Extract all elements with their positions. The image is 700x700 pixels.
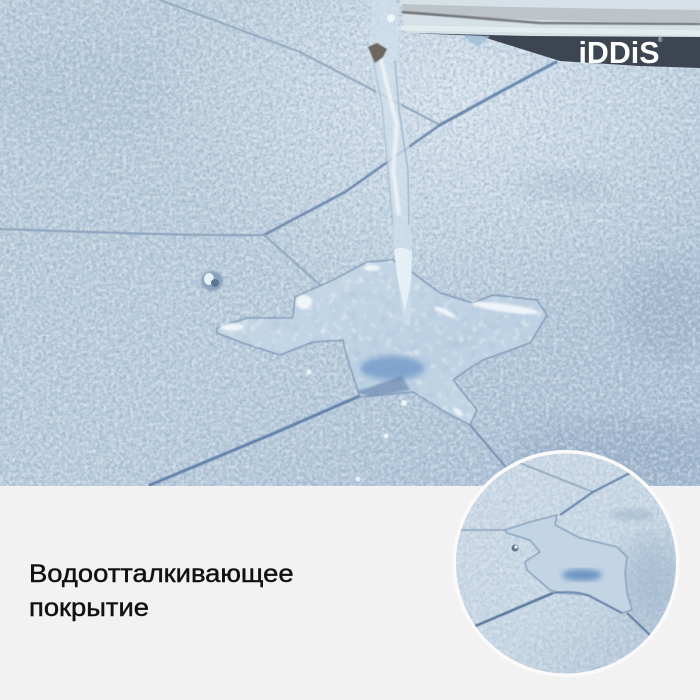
icon: water puddle [210, 255, 555, 430]
logo: iDDiS: iDDiS [578, 35, 660, 70]
water highlights [220, 265, 539, 418]
circle inset: water spread on fabric [450, 450, 682, 682]
icon: water droplet [201, 271, 223, 291]
icon: small droplets [306, 370, 407, 482]
heading: water-repellent coating: Водоотталкивающее [29, 560, 294, 588]
icon: falling water stream [368, 0, 412, 325]
icon: glass vessel [400, 0, 700, 68]
heading: water-repellent coating: покрытие [29, 594, 149, 622]
heading: water-repellent coating [29, 560, 294, 622]
logo: iDDiS: ® [658, 37, 663, 44]
quilted seams [0, 0, 556, 486]
darker damp patches [519, 172, 611, 198]
